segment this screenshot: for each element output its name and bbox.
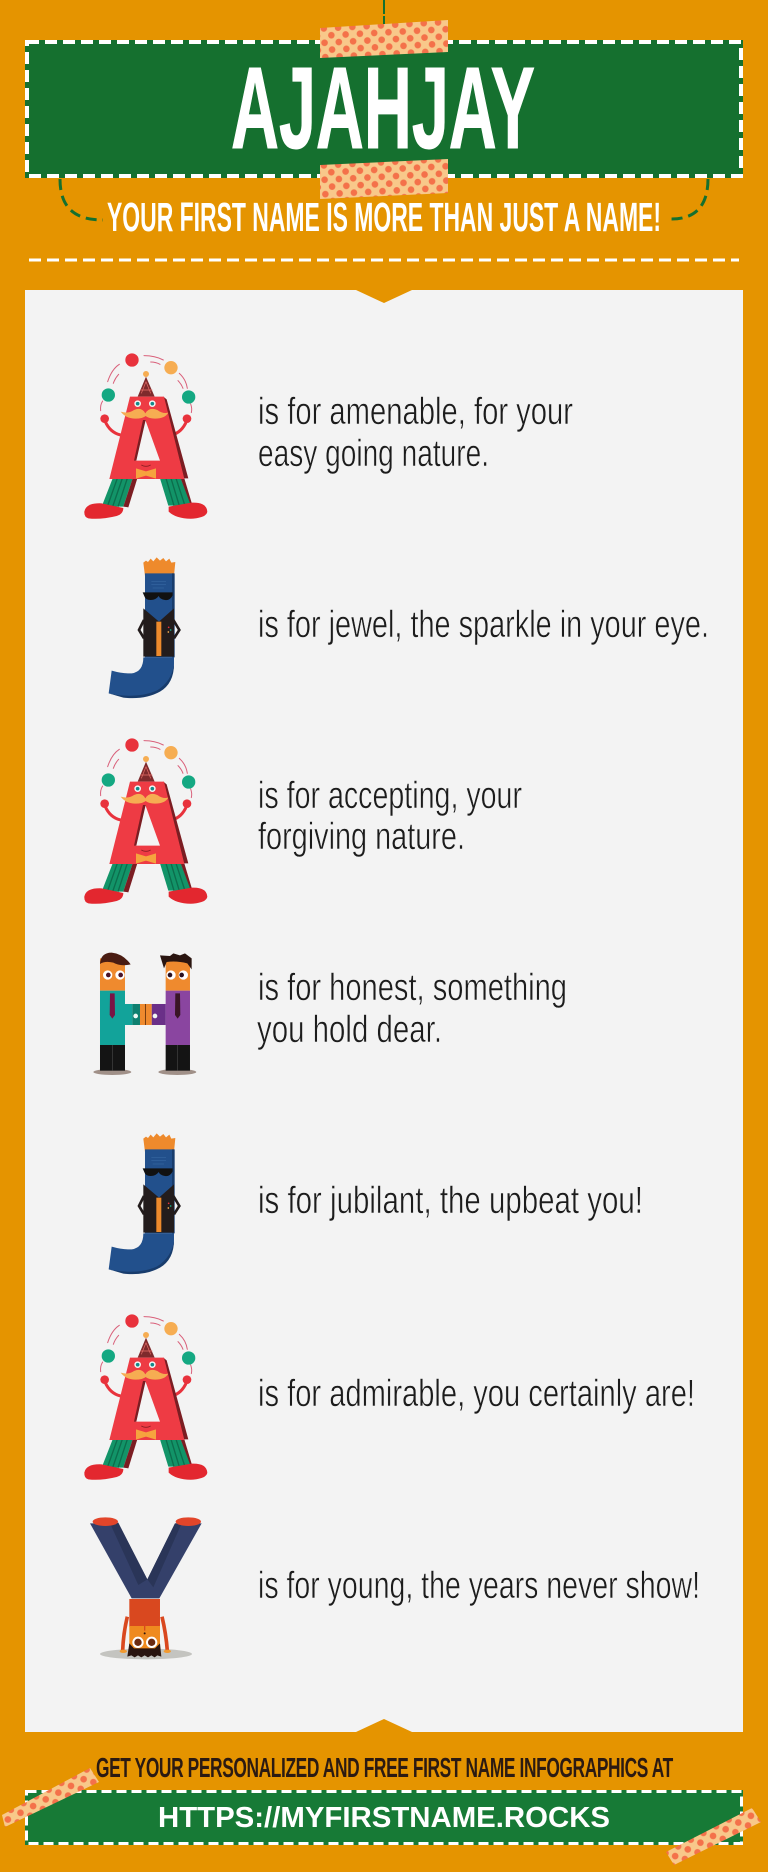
panel: letters bbox=[25, 290, 743, 1732]
tape footer right bbox=[666, 1808, 761, 1865]
text: H honest: you hold dear. bbox=[257, 1009, 442, 1051]
text: J jubilant: is for jubilant, the upbeat you! bbox=[258, 1180, 643, 1222]
dashed divider bbox=[29, 258, 739, 262]
footer banner bbox=[25, 1790, 743, 1845]
header hanging string bbox=[383, 0, 385, 24]
icon: letter J second bbox=[109, 1133, 179, 1274]
footer url: HTTPS://MYFIRSTNAME.ROCKS bbox=[158, 1802, 610, 1834]
text: A accepting bbox=[258, 775, 522, 858]
title banner bbox=[25, 40, 743, 178]
text: A accepting: forgiving nature. bbox=[258, 816, 465, 858]
text: A accepting: is for accepting, your bbox=[258, 775, 522, 817]
tape bottom bbox=[320, 159, 448, 199]
title: AJAHJAY bbox=[231, 43, 535, 173]
text: A amenable: is for amenable, for your bbox=[258, 391, 573, 433]
icon: letter Y handstand bbox=[90, 1517, 202, 1659]
text: A amenable: easy going nature. bbox=[258, 433, 489, 475]
icon: letter J bbox=[109, 557, 179, 698]
icon: letter A clown third bbox=[84, 1314, 207, 1480]
text: H honest bbox=[257, 967, 567, 1051]
icon: letter H two men bbox=[93, 953, 196, 1075]
tape footer left bbox=[2, 1768, 99, 1827]
text: H honest: is for honest, something bbox=[258, 967, 567, 1009]
tape top bbox=[320, 20, 448, 58]
icon: letter A clown bbox=[84, 353, 207, 519]
icon: letter A clown second bbox=[84, 738, 207, 904]
dashed connector right bbox=[669, 179, 708, 219]
footer heading: GET YOUR PERSONALIZED AND FREE FIRST NAME INFOGRAPHICS AT bbox=[96, 1752, 673, 1783]
dashed connector left bbox=[60, 179, 103, 220]
text: A amenable bbox=[258, 391, 573, 475]
